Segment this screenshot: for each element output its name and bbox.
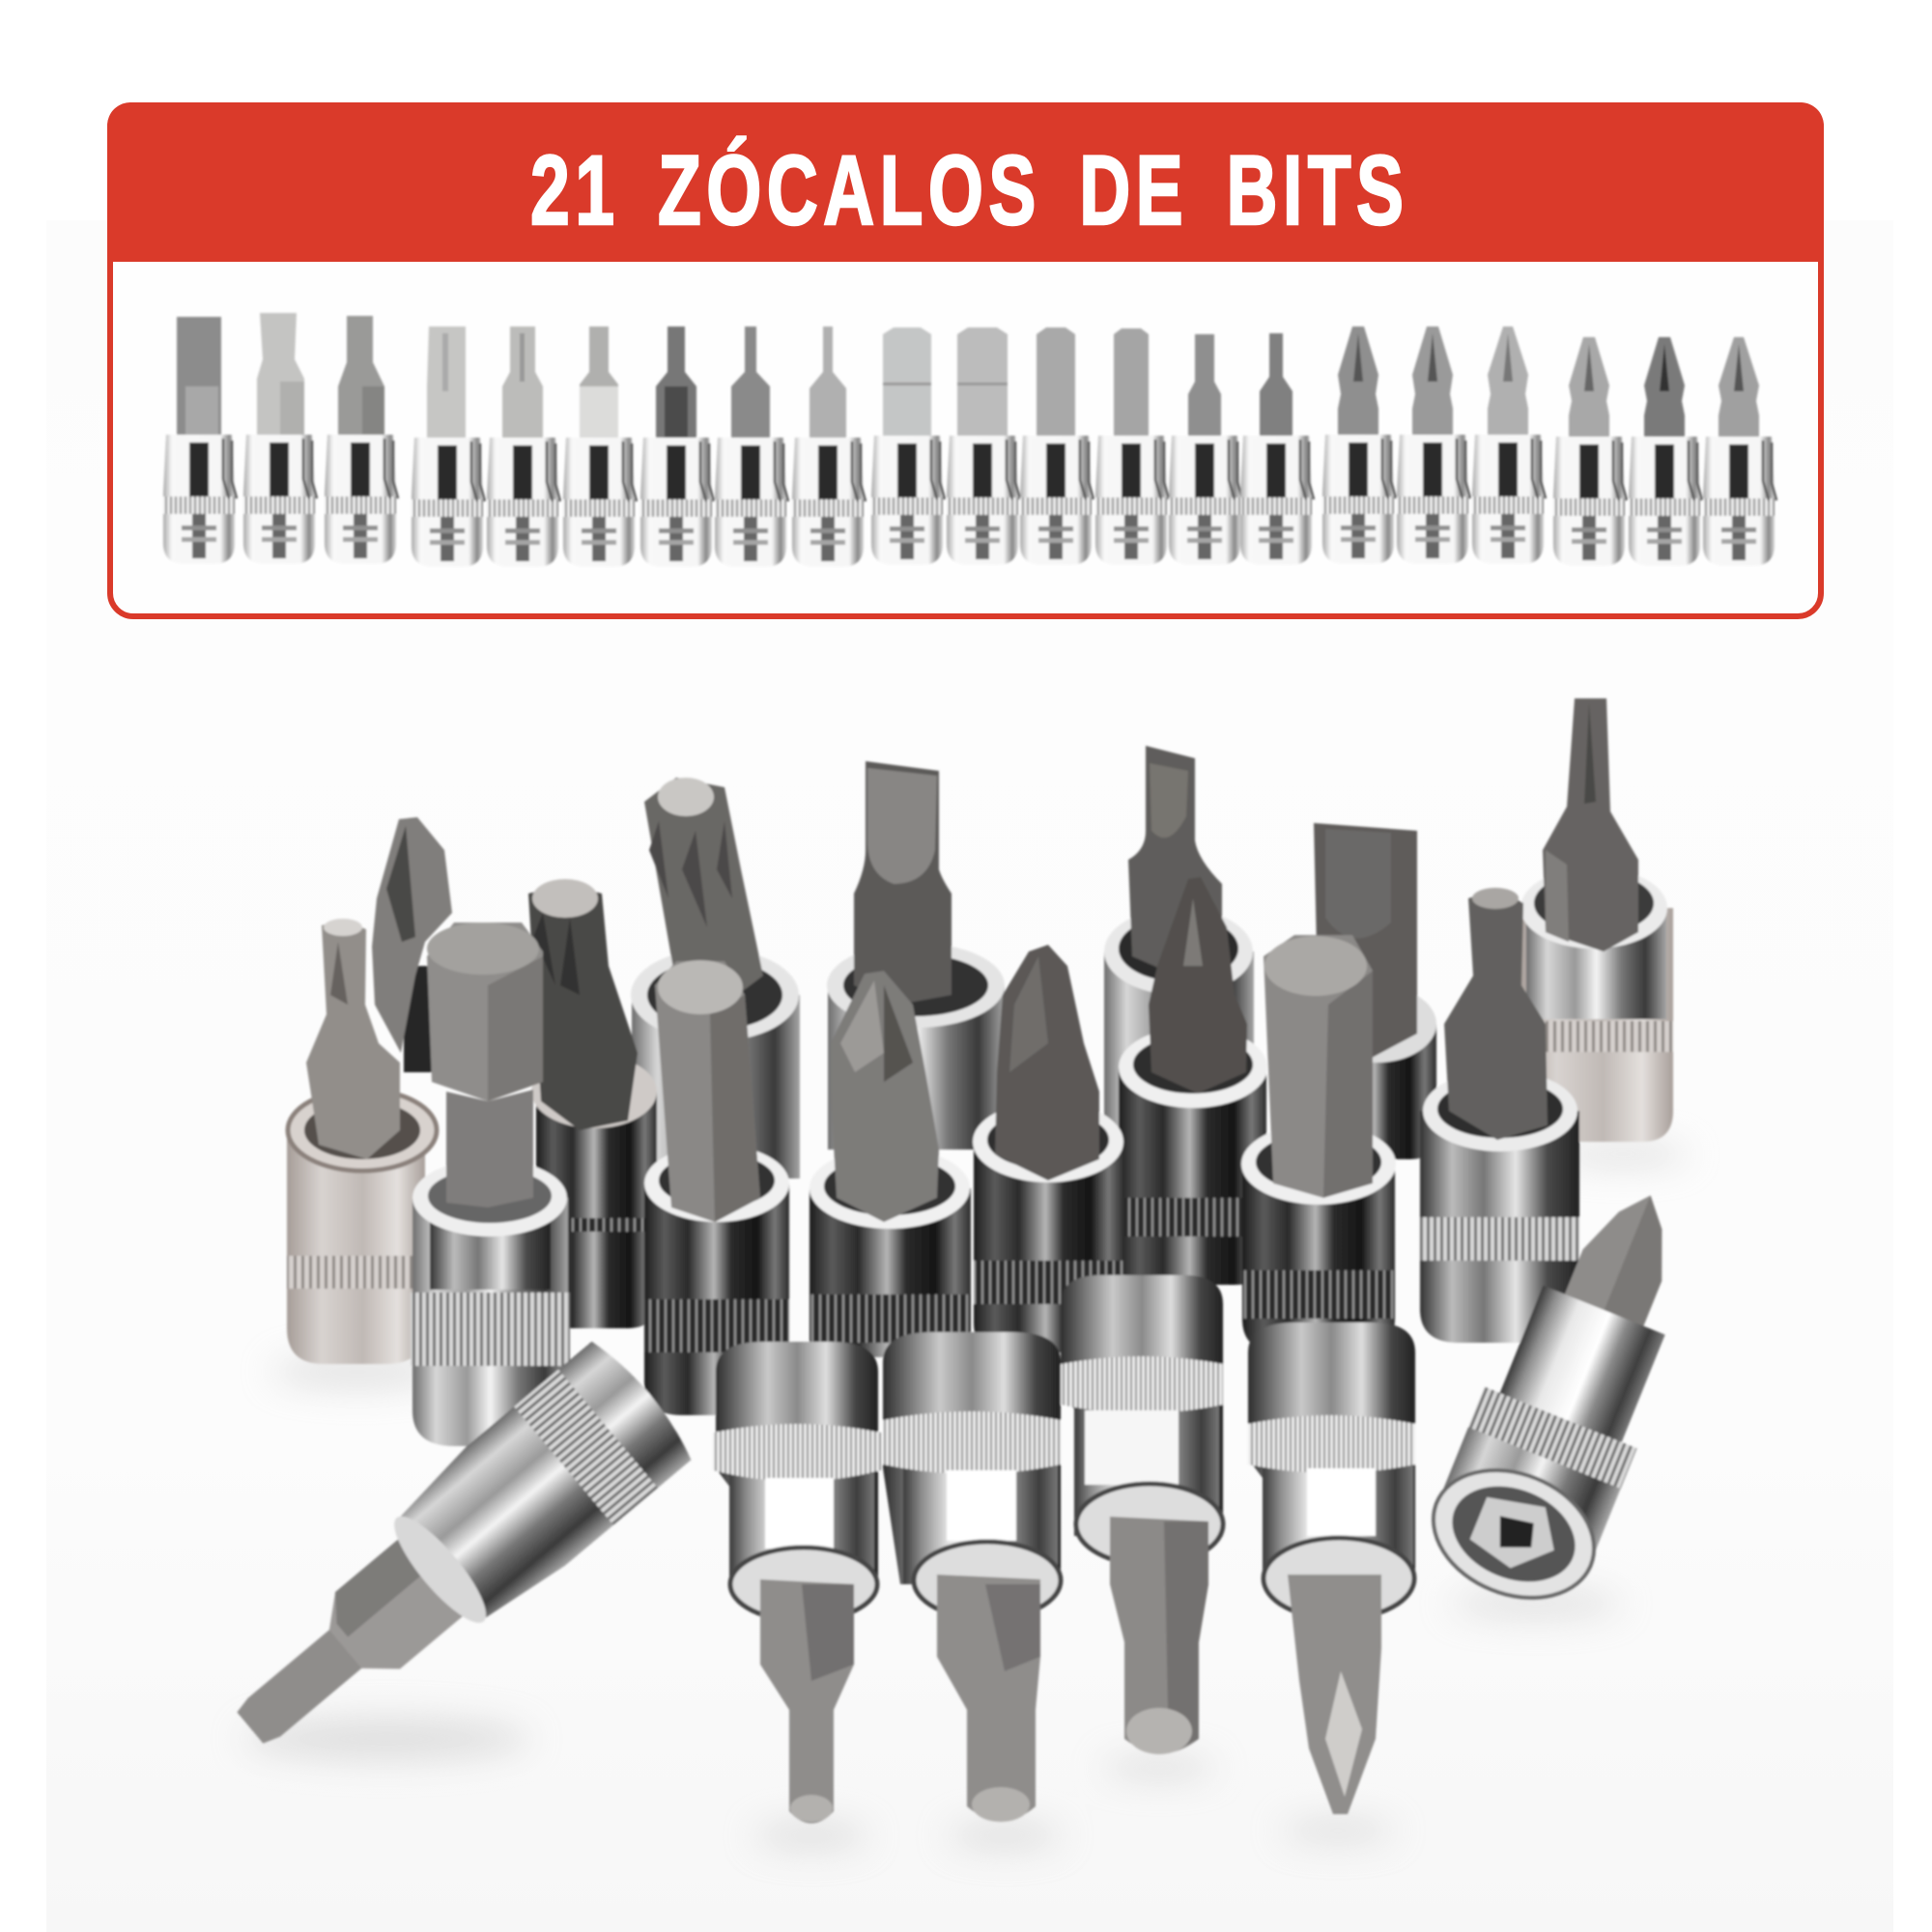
socket: front 4 xyxy=(1248,1322,1415,1814)
panel frame xyxy=(110,105,1821,616)
socket: front 2 xyxy=(883,1332,1061,1822)
panel: socket overview xyxy=(107,102,1824,616)
flat bits group xyxy=(163,313,398,564)
socket: back large torx xyxy=(631,778,800,1179)
socket: dark phillips right xyxy=(1119,877,1267,1285)
row of 21 sockets xyxy=(163,313,1776,567)
socket: back flat bit xyxy=(1104,746,1254,1130)
socket: back right torx xyxy=(1518,698,1673,1142)
socket: front 3 xyxy=(1061,1275,1223,1754)
socket: dark phillips centre xyxy=(973,945,1123,1352)
socket: back centre flat bit xyxy=(827,761,1005,1150)
hex bits group xyxy=(871,327,1314,565)
panel header bar xyxy=(107,102,1824,262)
torx bits group xyxy=(412,327,866,567)
phillips bits group 2 xyxy=(1553,337,1776,566)
socket: front 1 xyxy=(713,1342,881,1824)
socket: chrome torx right xyxy=(1420,888,1579,1343)
soft shadows on surface xyxy=(242,1143,1690,1849)
title: 21 ZÓCALOS DE BITS xyxy=(530,135,1408,245)
socket: left dull torx xyxy=(287,919,437,1364)
socket: tilted open end xyxy=(1414,1164,1727,1621)
socket: back wide flat bit xyxy=(1314,823,1436,1159)
photo: cluster of 21 bit sockets xyxy=(201,698,1727,1824)
socket: dark torx xyxy=(528,879,657,1328)
socket: dark phillips left xyxy=(810,971,971,1357)
phillips bits group 1 xyxy=(1322,327,1546,564)
socket: lying torx xyxy=(201,1335,699,1788)
socket: large silver hex xyxy=(411,923,570,1446)
socket: dark hex right xyxy=(1241,935,1396,1352)
bit: back left phillips xyxy=(372,817,452,1072)
socket: dark hex xyxy=(644,960,789,1415)
